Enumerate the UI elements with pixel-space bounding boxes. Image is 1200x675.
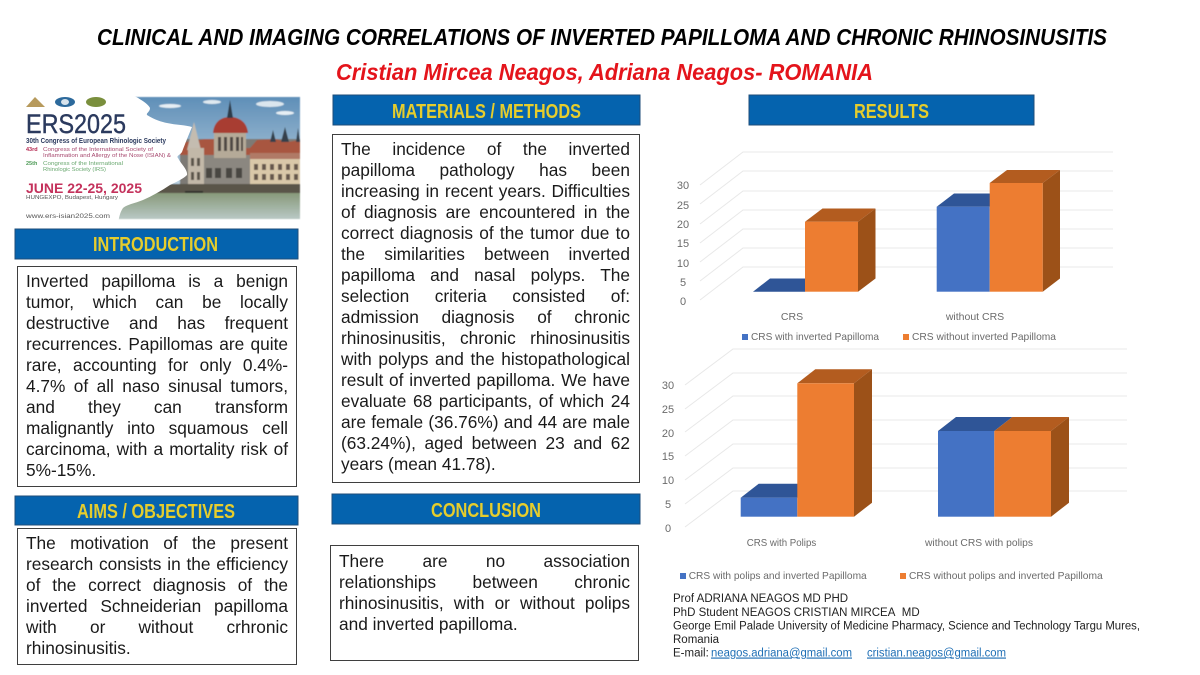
banner text: Congress of the International xyxy=(43,161,123,167)
text: aims / objectives: with or without crhronic xyxy=(26,617,288,637)
bar chart: CRS and inverted papilloma xyxy=(677,152,1113,343)
author affiliations and contact: George Emil Palade University of Medicine Pharmacy, Science and Technology Targu Mures, xyxy=(673,620,1140,632)
title: CLINICAL AND IMAGING CORRELATIONS OF INVERTED PAPILLOMA AND CHRONIC RHINOSINUSITIS xyxy=(97,24,1108,50)
author affiliations and contact: Prof ADRIANA NEAGOS MD PHD xyxy=(673,593,848,605)
text: materials / methods: evaluate 68 participants, of which 24 xyxy=(341,391,630,411)
text: materials / methods: correct diagnosis of the tumor due to xyxy=(341,223,630,243)
text: aims / objectives: inverted Schneiderian papilloma xyxy=(26,596,288,616)
y axis labels: 10 xyxy=(677,258,689,270)
category labels xyxy=(781,311,1004,323)
category labels: CRS xyxy=(781,311,803,323)
society logos xyxy=(26,97,106,107)
author affiliations and contact: neagos.adriana@gmail.com xyxy=(711,648,852,660)
legend xyxy=(742,331,1056,343)
banner text: 25th xyxy=(26,161,38,167)
text: materials / methods: admission diagnosis of chronic xyxy=(341,307,630,327)
banner text: www.ers-isian2025.com xyxy=(25,213,110,220)
text: introduction: rare, accounting for only 0.4%- xyxy=(26,355,288,375)
heading: materials / methods xyxy=(333,95,640,125)
authors subtitle: Cristian Mircea Neagos, Adriana Neagos- ROMANIA xyxy=(336,59,873,85)
y axis labels xyxy=(677,180,689,308)
text: conclusion xyxy=(339,551,630,634)
panel: aims / objectives xyxy=(17,528,297,665)
text: conclusion: relationships between chronic xyxy=(339,572,630,592)
y axis labels: 5 xyxy=(680,277,686,289)
legend: CRS with inverted Papilloma xyxy=(751,331,879,343)
text: introduction: recurrences. Papillomas are quite xyxy=(26,334,288,354)
text: introduction: Inverted papilloma is a benign xyxy=(26,271,288,291)
y axis labels: 15 xyxy=(662,451,674,463)
y axis labels: 25 xyxy=(677,200,689,212)
y axis labels: 30 xyxy=(677,180,689,192)
legend: CRS without polips and inverted Papilloma xyxy=(909,570,1103,582)
category labels xyxy=(747,537,1033,549)
y axis labels: 25 xyxy=(662,404,674,416)
text: materials / methods: of diagnosis are encountered in the xyxy=(341,202,630,222)
text: introduction: 5%-15%. xyxy=(26,460,96,480)
text: materials / methods: years (mean 41.78). xyxy=(341,454,496,474)
banner text: 43rd xyxy=(26,147,38,153)
y axis labels: 10 xyxy=(662,475,674,487)
banner text: Rhinologic Society (IRS) xyxy=(43,167,106,173)
text: materials / methods: are female (36.76%) and 44 are male xyxy=(341,412,630,432)
y axis labels xyxy=(662,380,674,535)
banner photo xyxy=(118,97,300,219)
text: materials / methods: papilloma pathology has been xyxy=(341,160,630,180)
text: aims / objectives: The motivation of the present xyxy=(26,533,288,553)
text: aims / objectives: of the correct diagnosis of the xyxy=(26,575,288,595)
text: materials / methods: selection criteria consisted of: xyxy=(341,286,630,306)
author affiliations and contact: Romania xyxy=(673,634,720,646)
text: materials / methods: The incidence of the inverted xyxy=(341,139,630,159)
y axis labels: 20 xyxy=(662,428,674,440)
bars: CRS group xyxy=(753,208,876,292)
bars: CRS with polips group xyxy=(741,369,872,517)
panel: materials / methods xyxy=(332,134,640,483)
heading: introduction xyxy=(15,229,298,259)
panel: introduction xyxy=(17,266,297,487)
y axis labels: 15 xyxy=(677,238,689,250)
text: aims / objectives: research consists in the efficiency xyxy=(26,554,288,574)
category labels: without CRS xyxy=(945,311,1004,323)
text: conclusion: There are no association xyxy=(339,551,630,571)
y axis labels: 20 xyxy=(677,219,689,231)
text: introduction: 4.7% of all naso sinusal tumors, xyxy=(26,376,288,396)
banner text: Congress of the International Society of xyxy=(43,147,154,153)
text: materials / methods xyxy=(341,139,630,474)
y axis labels: 30 xyxy=(662,380,674,392)
banner text xyxy=(25,109,171,220)
text: conclusion: and inverted papilloma. xyxy=(339,614,518,634)
text: materials / methods: papilloma and nasal polyps. The xyxy=(341,265,630,285)
text: materials / methods: increasing in recent years. Difficulties xyxy=(341,181,630,201)
category labels: CRS with Polips xyxy=(747,537,816,549)
heading: introduction: INTRODUCTION xyxy=(93,234,218,256)
text: materials / methods: result of inverted papilloma. We have xyxy=(341,370,630,390)
legend: CRS without inverted Papilloma xyxy=(912,331,1056,343)
text: introduction: malignantly into squamous cell xyxy=(26,418,288,438)
text: materials / methods: with polyps and the histopathological xyxy=(341,349,630,369)
banner white silhouette xyxy=(22,90,192,223)
bars: without CRS group xyxy=(937,170,1060,292)
y axis labels: 5 xyxy=(665,499,671,511)
legend xyxy=(680,570,1103,582)
banner text: JUNE 22-25, 2025 xyxy=(26,181,143,196)
author affiliations and contact xyxy=(673,593,1140,660)
text: materials / methods: (63.24%), aged between 23 and 62 xyxy=(341,433,630,453)
heading: results: RESULTS xyxy=(854,101,929,123)
author affiliations and contact: PhD Student NEAGOS CRISTIAN MIRCEA MD xyxy=(673,607,920,619)
banner text: 30th Congress of European Rhinologic Society xyxy=(26,138,166,145)
heading: materials / methods: MATERIALS / METHODS xyxy=(392,101,581,123)
text: conclusion: rhinosinusitis, with or without polips xyxy=(339,593,630,613)
text: aims / objectives: rhinosinusitis. xyxy=(26,638,131,658)
banner text: ERS2025 xyxy=(26,109,126,139)
author affiliations and contact: cristian.neagos@gmail.com xyxy=(867,648,1006,660)
heading: aims / objectives xyxy=(15,496,298,525)
bars: without CRS with polips group xyxy=(938,417,1069,517)
banner text: HUNGEXPO, Budapest, Hungary xyxy=(26,195,118,201)
heading: conclusion xyxy=(332,494,640,524)
legend: CRS with polips and inverted Papilloma xyxy=(689,570,867,582)
text: aims / objectives xyxy=(26,533,288,658)
congress banner xyxy=(22,90,300,223)
text: introduction: destructive and has frequent xyxy=(26,313,288,333)
heading: aims / objectives: AIMS / OBJECTIVES xyxy=(77,501,235,523)
text: introduction: tumor, which can be locally xyxy=(26,292,288,312)
heading: results xyxy=(749,95,1034,125)
text: materials / methods: rhinosinusitis, chronic rhinosinusitis xyxy=(341,328,630,348)
heading: conclusion: CONCLUSION xyxy=(431,500,541,522)
text: introduction: carcinoma, with a mortality risk of xyxy=(26,439,288,459)
text: introduction: and they can transform xyxy=(26,397,288,417)
text: introduction xyxy=(26,271,288,480)
bar chart: CRS with polyps and inverted papilloma xyxy=(662,349,1127,582)
author affiliations and contact: E-mail: xyxy=(673,648,709,660)
text: materials / methods: the similarities between inverted xyxy=(341,244,630,264)
panel: conclusion xyxy=(330,545,639,661)
y axis labels: 0 xyxy=(665,523,671,535)
banner text: Inflammation and Allergy of the Nose (ISIAN) & xyxy=(43,153,171,159)
category labels: without CRS with polips xyxy=(924,537,1033,549)
y axis labels: 0 xyxy=(680,296,686,308)
